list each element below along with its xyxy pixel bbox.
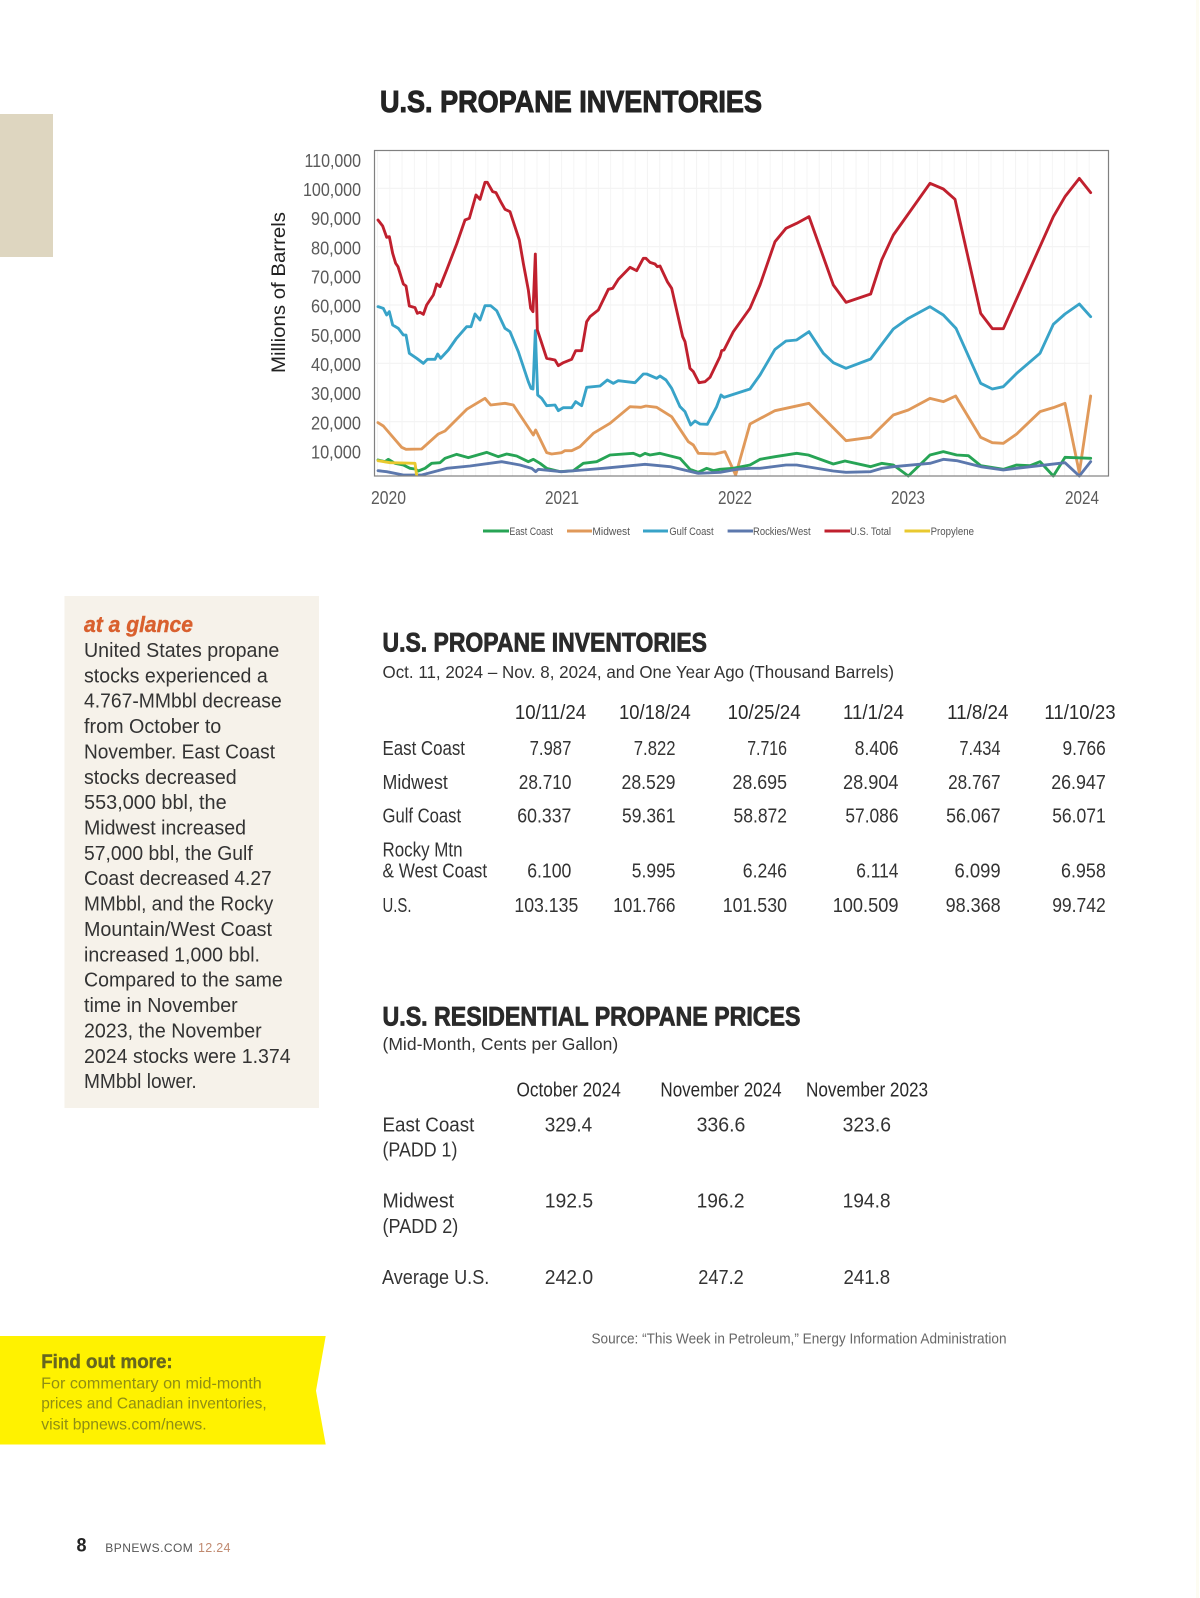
at a glance body text: Compared to the same [84, 970, 283, 992]
yellow ribbon [0, 1336, 326, 1444]
at a glance body text: time in November [84, 995, 238, 1017]
at a glance body text: Midwest increased [84, 818, 246, 840]
inventories table header row [515, 702, 1116, 724]
page footer [76, 1536, 231, 1557]
row: U.S.: 101.530 [723, 895, 787, 917]
row: Rocky Mtn and West Coast: 5.995 [632, 861, 676, 883]
y-axis labels: 10,000 [311, 442, 361, 462]
decorative beige tab [0, 114, 53, 257]
at a glance body text: stocks decreased [84, 767, 237, 789]
row: Average U.S.: Average U.S. [382, 1267, 489, 1289]
at a glance body text: 57,000 bbl, the Gulf [84, 843, 253, 865]
prices table header row: October 2024 [516, 1080, 621, 1102]
row: Midwest [382, 772, 1106, 794]
row: Average U.S. [382, 1267, 890, 1289]
row: East Coast PADD 1: (PADD 1) [382, 1140, 457, 1162]
row: Gulf Coast: 60.337 [517, 806, 571, 828]
inventories table section [382, 628, 1116, 917]
y-axis labels: 30,000 [311, 384, 361, 404]
row: East Coast [382, 738, 1106, 760]
y-axis labels: 90,000 [311, 209, 361, 229]
row: Gulf Coast: 59.361 [622, 806, 676, 828]
at a glance body text: MMbbl, and the Rocky [84, 894, 273, 916]
row: Rocky Mtn and West Coast: 6.100 [527, 861, 571, 883]
row: Rocky Mtn and West Coast: 6.099 [954, 861, 1001, 883]
title: U.S. propane inventories chart: U.S. PROPANE INVENTORIES [380, 84, 762, 119]
line: Rockies/West [378, 459, 1091, 476]
row: Midwest PADD 2: 192.5 [545, 1191, 593, 1213]
row: Gulf Coast: 57.086 [845, 806, 898, 828]
row: U.S.: 103.135 [514, 895, 578, 917]
row: U.S. [382, 895, 1106, 917]
row: East Coast PADD 1: 336.6 [697, 1115, 745, 1137]
prices table header row: November 2023 [806, 1080, 928, 1102]
row: East Coast: 7.716 [747, 738, 787, 760]
row: Midwest: Midwest [382, 772, 448, 794]
plot frame [374, 150, 1108, 476]
x-axis labels: 2021 [545, 488, 579, 508]
publication name: BPNEWS.COM [105, 1541, 193, 1555]
inventories table header row: 10/25/24 [728, 702, 801, 724]
row: Rocky Mtn and West Coast: Rocky Mtn [382, 840, 462, 862]
row: East Coast PADD 1 [382, 1115, 891, 1162]
line: Midwest [378, 396, 1091, 475]
line: Propylene [378, 461, 417, 475]
row: East Coast: East Coast [382, 738, 465, 760]
line chart: U.S. propane inventories 2020-2024 [269, 150, 1108, 538]
row: East Coast PADD 1: 329.4 [545, 1115, 592, 1137]
panel: at a glance [64, 596, 319, 1108]
inventories table header row: 10/11/24 [515, 702, 586, 724]
y-axis labels: 20,000 [311, 414, 361, 434]
prices table header row [516, 1080, 928, 1102]
row: Rocky Mtn and West Coast: 6.114 [856, 861, 898, 883]
line: Gulf Coast [378, 304, 1091, 425]
x-axis labels [371, 488, 1099, 508]
row: East Coast: 7.987 [530, 738, 571, 760]
prices table header row: November 2024 [660, 1080, 782, 1102]
row: U.S.: 98.368 [946, 895, 1001, 917]
row: Midwest PADD 2 [382, 1191, 891, 1238]
row: Gulf Coast [382, 806, 1106, 828]
y-axis labels: 80,000 [311, 238, 361, 258]
at a glance body text: increased 1,000 bbl. [84, 944, 260, 966]
chart legend: Midwest [592, 526, 630, 538]
row: Midwest: 26.947 [1051, 772, 1106, 794]
inventories table header row: 11/1/24 [843, 702, 904, 724]
row: U.S.: 101.766 [613, 895, 676, 917]
row: East Coast PADD 1: 323.6 [843, 1115, 891, 1137]
panel background [64, 596, 319, 1108]
y-axis labels: 110,000 [304, 151, 361, 171]
at a glance body text: United States propane [84, 640, 279, 662]
row: Rocky Mtn and West Coast [382, 840, 1106, 883]
inventories table heading: U.S. PROPANE INVENTORIES [382, 628, 707, 658]
row: U.S.: 100.509 [833, 895, 898, 917]
chart legend: Gulf Coast [669, 526, 714, 538]
chart legend: East Coast [509, 526, 553, 538]
row: Midwest: 28.710 [519, 772, 571, 794]
line: U.S. Total [378, 178, 1091, 383]
row: Midwest: 28.904 [843, 772, 898, 794]
chart legend: Rockies/West [753, 526, 811, 538]
row: Average U.S.: 242.0 [545, 1267, 593, 1289]
callout text: visit bpnews.com/news. [41, 1416, 207, 1433]
row: East Coast: 7.434 [959, 738, 1001, 760]
row: Gulf Coast: 58.872 [734, 806, 787, 828]
y-axis title: Millions of Barrels [269, 212, 290, 373]
inventories table header row: 10/18/24 [619, 702, 691, 724]
row: U.S.: 99.742 [1052, 895, 1106, 917]
at a glance body text: from October to [84, 716, 221, 738]
page number: 8 [76, 1536, 86, 1557]
row: East Coast: 9.766 [1062, 738, 1106, 760]
row: Rocky Mtn and West Coast: 6.246 [743, 861, 787, 883]
at a glance body text: 2024 stocks were 1.374 [84, 1046, 291, 1068]
row: Midwest: 28.767 [948, 772, 1001, 794]
at a glance body text: stocks experienced a [84, 665, 269, 687]
row: Midwest: 28.695 [732, 772, 787, 794]
chart legend [483, 526, 974, 538]
at a glance body text: Mountain/West Coast [84, 919, 272, 941]
y-axis labels: 40,000 [311, 355, 361, 375]
x-axis labels: 2023 [891, 488, 925, 508]
at a glance body text: 553,000 bbl, the [84, 792, 227, 814]
callout heading: Find out more: [41, 1351, 173, 1373]
row: Average U.S.: 247.2 [698, 1267, 744, 1289]
callout: find out more [0, 1336, 326, 1444]
x-axis labels: 2020 [371, 488, 406, 508]
inventories table header row: 11/8/24 [947, 702, 1008, 724]
row: Rocky Mtn and West Coast: 6.958 [1061, 861, 1106, 883]
row: Rocky Mtn and West Coast: & West Coast [382, 861, 487, 883]
chart legend: U.S. Total [850, 526, 891, 538]
at a glance body text: 4.767-MMbbl decrease [84, 691, 282, 713]
at a glance body text: MMbbl lower. [84, 1071, 197, 1093]
row: East Coast: 8.406 [855, 738, 898, 760]
y-axis labels: 100,000 [303, 180, 361, 200]
row: Average U.S.: 241.8 [844, 1267, 890, 1289]
inventories table header row: 11/10/23 [1044, 702, 1116, 724]
row: East Coast PADD 1: East Coast [382, 1115, 475, 1137]
at a glance body text: Coast decreased 4.27 [84, 868, 272, 890]
y-axis labels: 70,000 [311, 268, 361, 288]
row: Midwest: 28.529 [622, 772, 676, 794]
callout text: prices and Canadian inventories, [41, 1396, 267, 1413]
row: Midwest PADD 2: 194.8 [843, 1191, 891, 1213]
x-axis labels: 2022 [718, 488, 752, 508]
y-axis labels: 60,000 [311, 296, 361, 316]
row: Midwest PADD 2: Midwest [382, 1191, 454, 1213]
callout text: For commentary on mid-month [41, 1376, 262, 1392]
row: Gulf Coast: 56.071 [1052, 806, 1106, 828]
x-axis labels: 2024 [1065, 488, 1099, 508]
issue date: 12.24 [198, 1541, 231, 1555]
chart legend: Propylene [931, 526, 974, 538]
row: Gulf Coast: 56.067 [946, 806, 1001, 828]
callout text [41, 1376, 267, 1433]
y-axis labels: 50,000 [311, 326, 361, 346]
inventories table subtitle: Oct. 11, 2024 – Nov. 8, 2024, and One Year Ago (Thousand Barrels) [382, 662, 894, 682]
row: U.S.: U.S. [382, 895, 412, 917]
row: Midwest PADD 2: (PADD 2) [382, 1216, 458, 1238]
y-axis labels [303, 151, 361, 462]
source note: Source: “This Week in Petroleum,” Energy Information Administration [592, 1330, 1006, 1348]
prices table heading: U.S. RESIDENTIAL PROPANE PRICES [382, 1002, 800, 1032]
plot grid [375, 151, 1098, 476]
residential prices table section [382, 1002, 928, 1289]
at a glance heading: at a glance [84, 612, 193, 637]
row: Midwest PADD 2: 196.2 [697, 1191, 745, 1213]
at a glance body text: 2023, the November [84, 1020, 262, 1042]
row: East Coast: 7.822 [634, 738, 676, 760]
row: Gulf Coast: Gulf Coast [382, 806, 461, 828]
data lines [378, 178, 1091, 476]
at a glance body text: November. East Coast [84, 741, 275, 763]
line: East Coast [378, 452, 1091, 476]
prices table subtitle: (Mid-Month, Cents per Gallon) [382, 1034, 618, 1054]
at a glance body text [84, 640, 291, 1093]
